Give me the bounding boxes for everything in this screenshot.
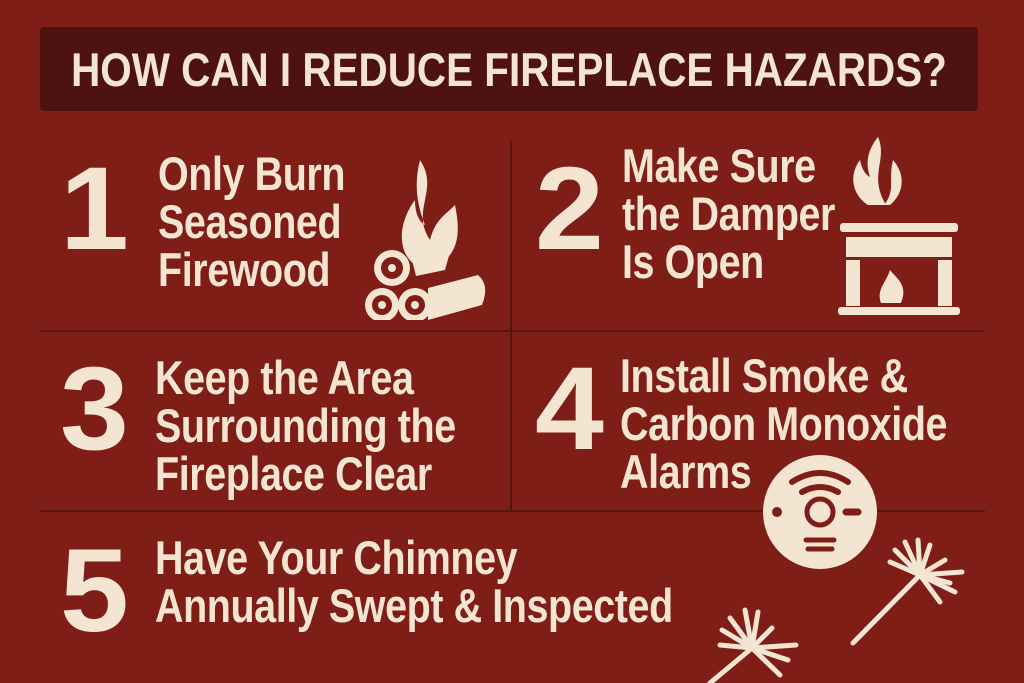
text 3: Keep the Area [155,351,414,404]
text 3 [155,351,456,500]
text 1: Only Burn [158,147,345,200]
text 5: Have Your Chimney [155,531,517,584]
item 3 [60,343,456,500]
text 5: Annually Swept & Inspected [155,579,673,632]
icon: chimney brushes [708,538,964,683]
number 4: 4 [535,343,604,475]
text 1: Seasoned [158,195,341,248]
number 3: 3 [60,343,129,475]
text 4: Install Smoke & [620,349,908,402]
text 4: Carbon Monoxide [620,397,947,450]
text 2: the Damper [622,187,835,240]
item 5 [60,525,673,657]
icon: logs and flame [365,160,486,320]
number 5: 5 [60,525,129,657]
text 5 [155,531,673,632]
number 1: 1 [60,143,129,275]
title bar [40,27,978,111]
item 2 [535,137,960,315]
item 4 [535,343,947,498]
text 1: Firewood [158,243,330,296]
item 1 [60,143,486,320]
text 2 [622,139,835,288]
text 2: Is Open [622,235,764,288]
icon: smoke alarm [763,455,877,569]
text 3: Surrounding the [155,399,456,452]
number 2: 2 [535,143,604,275]
text 4 [620,349,947,498]
title bar: HOW CAN I REDUCE FIREPLACE HAZARDS? [71,43,947,96]
icon: fireplace [838,137,960,315]
text 3: Fireplace Clear [155,447,432,500]
text 1 [158,147,345,296]
text 2: Make Sure [622,139,816,192]
text 4: Alarms [620,445,751,498]
